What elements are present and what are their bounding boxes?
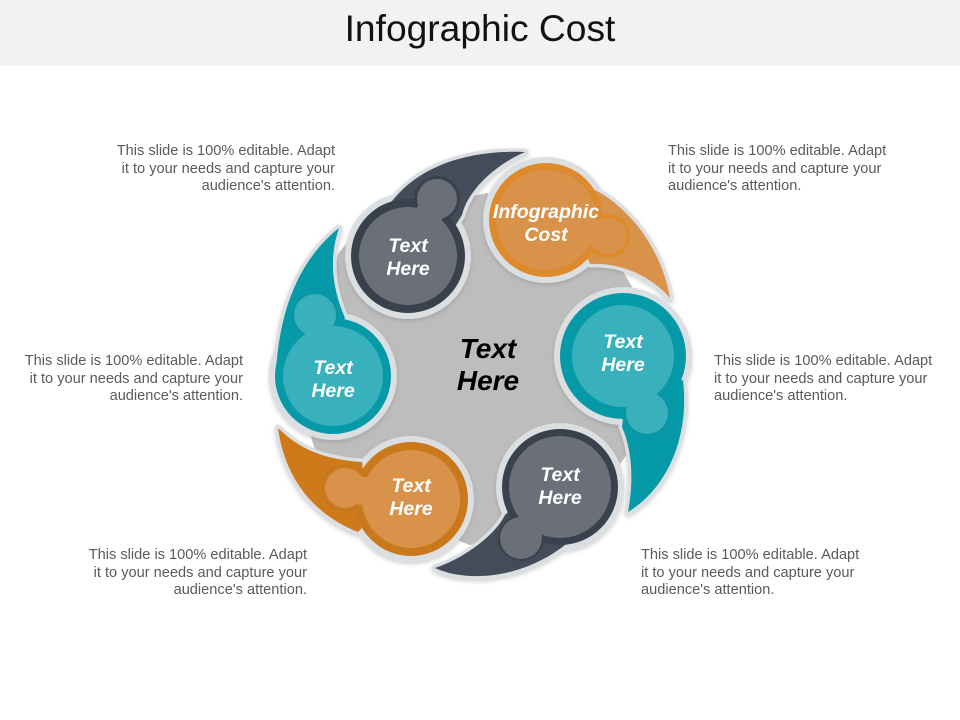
center label (457, 333, 519, 396)
text block: top left: This slide is 100% editable. Adapt (117, 143, 335, 159)
segment: teal right (560, 293, 686, 512)
segment: dark top left (351, 152, 525, 313)
segment: orange top right (489, 163, 670, 298)
text block: middle right: audience's attention. (714, 388, 847, 404)
text block: bottom left: This slide is 100% editable. Adapt (89, 547, 307, 563)
text block: bottom left (89, 547, 307, 598)
segment: orange bottom left (278, 428, 468, 556)
center label: Text (460, 333, 518, 364)
text block: middle left: audience's attention. (110, 388, 243, 404)
text block: bottom left: audience's attention. (174, 582, 307, 598)
text block: middle left: This slide is 100% editable. Adapt (25, 353, 243, 369)
segment: dark top left: Here (386, 258, 430, 280)
text block: middle right: This slide is 100% editable. Adapt (714, 353, 932, 369)
segment: dark top left: Text (388, 235, 429, 257)
text block: middle left (25, 353, 243, 404)
segment: orange bottom left: Here (389, 498, 433, 520)
text block: top right: This slide is 100% editable. Adapt (668, 143, 886, 159)
text block: middle right (714, 353, 932, 404)
segment: dark bottom right: Text (540, 464, 581, 486)
segment: teal left (275, 228, 391, 434)
center label: Here (457, 365, 519, 396)
segment: dark bottom right (435, 429, 618, 576)
text block: top right: it to your needs and capture your (668, 161, 882, 177)
text block: top right: audience's attention. (668, 178, 801, 194)
text block: top left: it to your needs and capture your (122, 161, 335, 177)
text block: bottom right: This slide is 100% editable. Adapt (641, 547, 859, 563)
text block: bottom right: audience's attention. (641, 582, 774, 598)
title bar: Infographic Cost (345, 7, 616, 49)
text block: top left: audience's attention. (202, 178, 335, 194)
segment: orange top right: Infographic (493, 201, 599, 223)
text block: top left (117, 143, 335, 194)
text block: top right (668, 143, 886, 194)
panel: central grey hub (300, 193, 640, 545)
segment: orange bottom left: Text (391, 475, 432, 497)
segment: teal left: Here (311, 380, 355, 402)
text block: bottom right: it to your needs and capture your (641, 565, 855, 581)
text block: middle right: it to your needs and capture your (714, 371, 928, 387)
title bar (0, 0, 960, 66)
segment: teal left: Text (313, 357, 354, 379)
segment: orange top right: Cost (524, 224, 569, 246)
segment: dark bottom right: Here (538, 487, 582, 509)
segment: teal right: Here (601, 354, 645, 376)
segment: teal right: Text (603, 331, 644, 353)
text block: bottom left: it to your needs and capture your (94, 565, 307, 581)
text block: bottom right (641, 547, 859, 598)
text block: middle left: it to your needs and capture your (30, 371, 243, 387)
